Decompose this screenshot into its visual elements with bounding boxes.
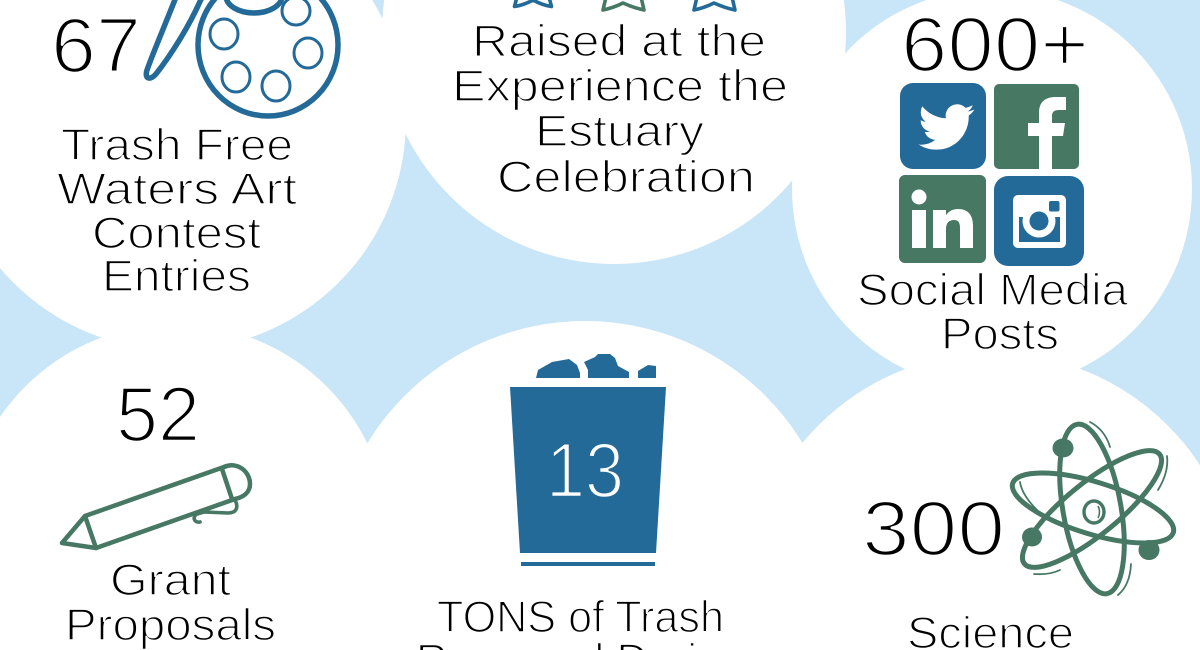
number: 600+: 600+ [901,0,1089,88]
icon: paint palette and brush [146,0,338,116]
panel: grant proposals [0,324,389,650]
label: art contest: Trash Free [61,121,293,170]
label: raised at the celebration: Celebration [497,153,755,202]
label: raised at the celebration [452,17,788,202]
icon: ribbons [514,0,735,10]
icon: atom [1005,419,1181,599]
number: 67: 67 [51,1,141,89]
number: 300: 300 [862,484,1005,572]
label: raised at the celebration: Experience the [452,62,788,111]
panel: tons of trash [330,321,840,650]
number: 13: 13 [546,426,624,514]
panel: experience the estuary [382,0,846,264]
label: tons of trash removed: TONS of Trash [437,593,724,642]
label: art contest: Contest [92,209,262,258]
icon: trash bucket [510,354,666,566]
icon: facebook [994,84,1079,169]
label: raised at the celebration: Raised at the [472,17,766,66]
label: social media posts: Posts [941,310,1059,359]
icon: linkedin [899,175,986,263]
panel: social media [792,0,1192,389]
label: grant proposals: Proposals [65,601,276,650]
label: art contest: Waters Art [57,165,298,214]
label: social media posts: Social Media [857,266,1128,315]
label: raised at the celebration: Estuary [535,107,705,156]
icon: twitter [900,83,986,169]
label: art contest: Entries [102,252,251,301]
icon: pen [62,465,250,548]
label: grant proposals: Grant [110,556,232,605]
panel: science [746,353,1200,650]
number: 52: 52 [116,370,200,458]
panel: art contest [0,0,406,350]
label: social media posts [857,266,1128,359]
icon: instagram [994,176,1084,266]
label: grant proposals [65,556,276,650]
label: art contest [57,121,298,301]
